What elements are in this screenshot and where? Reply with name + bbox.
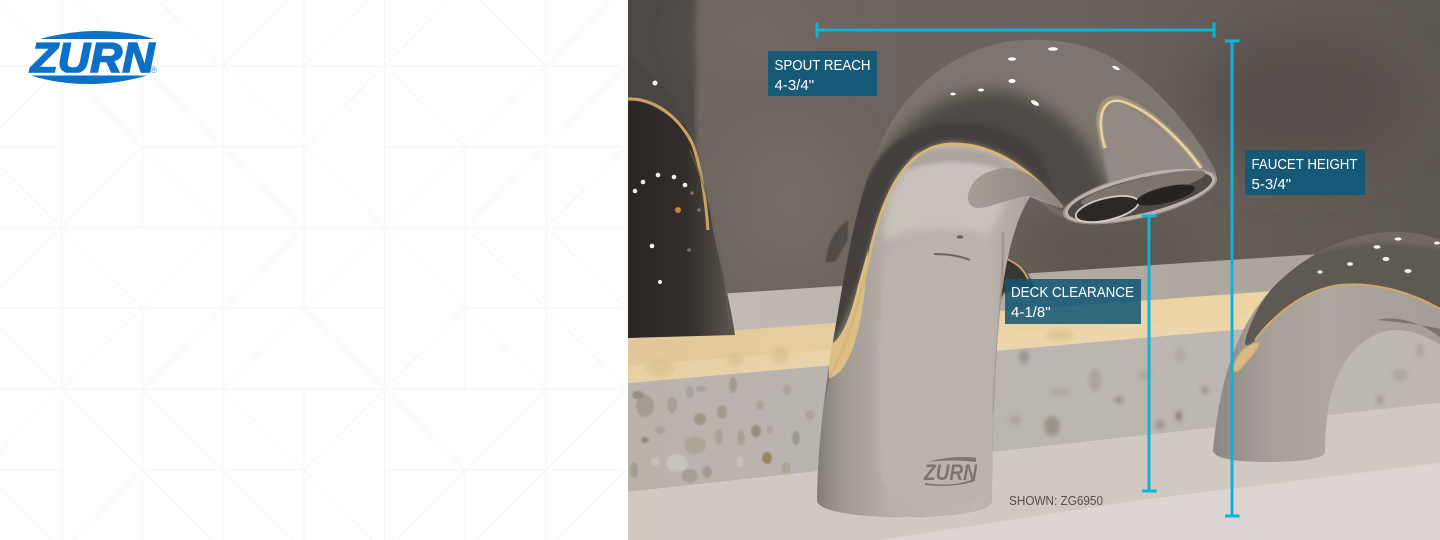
- rear ledge: [630, 254, 1316, 345]
- callout: deck clearance: [1005, 279, 1141, 324]
- photo background wall: [628, 0, 1440, 294]
- faucet: aerator nozzle: [1063, 168, 1217, 224]
- callout: faucet height: 5-3/4": [1252, 176, 1291, 193]
- panel: faucet photo scene: [620, 0, 1440, 540]
- callout: deck clearance: DECK CLEARANCE: [1011, 284, 1134, 301]
- faucet: engraved Zurn logo: ZURN: [923, 460, 978, 485]
- faucet: right neighbouring faucet: [1213, 227, 1440, 462]
- callout: spout reach: SPOUT REACH: [774, 57, 870, 74]
- faucet: rear handle and mirror reflection behind the main faucet: [826, 220, 1034, 300]
- panel: white patterned background: [0, 0, 628, 540]
- caption: model shown: SHOWN: ZG6950: [1009, 494, 1103, 508]
- callout: faucet height: FAUCET HEIGHT: [1252, 156, 1358, 173]
- callout: spout reach: 4-3/4": [774, 77, 814, 94]
- faucet: left mirror reflection: [628, 53, 735, 338]
- faucet: main ZG6950: [817, 40, 1222, 517]
- logo: Zurn: ZURN: [28, 34, 155, 82]
- callout: deck clearance: 4-1/8": [1011, 304, 1051, 321]
- terrazzo backsplash: [628, 312, 1440, 492]
- dimension line: faucet height: [1225, 41, 1240, 516]
- dimension line: spout reach: [817, 22, 1214, 38]
- countertop: [628, 403, 1440, 540]
- callout: spout reach: [768, 51, 877, 96]
- dimension line: deck clearance: [1142, 216, 1156, 491]
- callout: faucet height: [1245, 150, 1365, 195]
- illuminated light strip: [628, 291, 1270, 383]
- faucet: spout highlights: [950, 47, 1201, 168]
- faucet: sensor marks: [934, 235, 970, 260]
- logo: Zurn: ®: [150, 65, 158, 75]
- faucet: sensor tongue: [968, 168, 1064, 208]
